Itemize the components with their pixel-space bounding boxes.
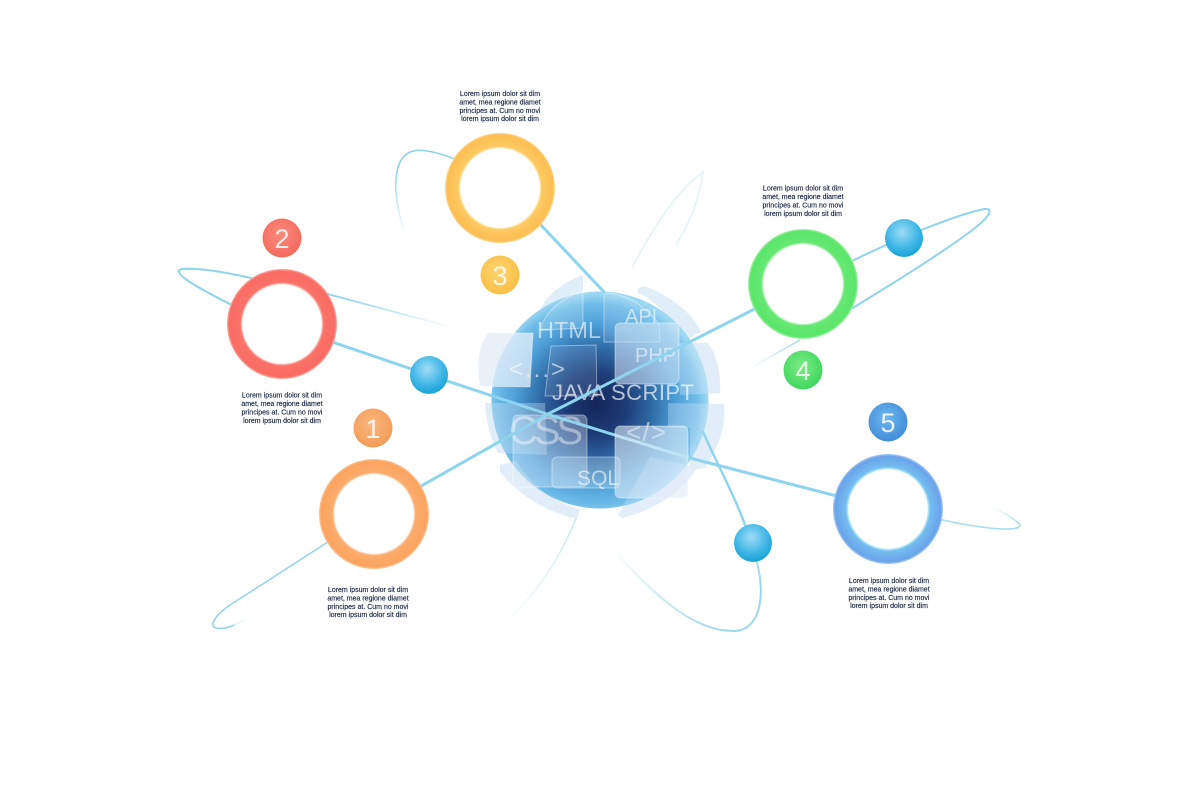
badge 4 <box>784 350 822 390</box>
label: SQL: SQL <box>577 467 619 490</box>
connector lines through globe <box>300 208 860 525</box>
tile: left angle bracket <box>478 333 533 387</box>
text block: item 1: amet, mea regione diamet <box>327 596 409 602</box>
label: CSS: CSS <box>509 409 583 453</box>
badge 2: 2 <box>274 224 290 254</box>
orbit: faint lower ellipse <box>498 518 576 628</box>
ring 5 <box>833 454 943 564</box>
text block: item 5: amet, mea regione diamet <box>848 586 930 594</box>
tile: SQL <box>552 457 620 488</box>
text block: item 5 <box>848 578 930 610</box>
text block: item 4: principes at. Cum no movi <box>763 202 844 210</box>
tile: API <box>604 293 660 342</box>
badge 5 <box>868 402 908 442</box>
orbit: lower left tip fade <box>234 618 250 625</box>
text block: item 4 <box>762 186 844 218</box>
text block: item 3: principes at. Cum no movi <box>460 108 541 115</box>
line: ring 3 to globe <box>525 208 604 292</box>
badge 3 <box>480 256 520 294</box>
text block: item 3: lorem ipsum dolor sit dim <box>461 116 539 123</box>
tile: CSS <box>513 415 587 487</box>
ring 3 <box>445 133 555 243</box>
badge 4: 4 <box>795 356 811 386</box>
text block: item 1: lorem ipsum dolor sit dim <box>329 612 407 619</box>
ring 1 <box>319 459 429 569</box>
tile: HTML <box>540 291 583 330</box>
ball: upper right <box>885 219 923 257</box>
shard: lower right, over the tile <box>618 457 697 518</box>
tile: closing tag, over the connector <box>615 426 688 498</box>
label: API: API <box>625 306 657 328</box>
line: globe to blue ball <box>703 432 745 525</box>
text block: item 4: lorem ipsum dolor sit dim <box>764 211 842 218</box>
orbit: lower left loop through ring 1 <box>213 531 345 628</box>
text block: item 1: principes at. Cum no movi <box>328 604 409 611</box>
badge 5: 5 <box>880 408 896 438</box>
text block: item 2: lorem ipsum dolor sit dim <box>243 418 321 425</box>
orbit: fading tail below ring 4 <box>754 340 800 366</box>
orbit: far right tail fade <box>990 506 1016 521</box>
text block: item 2: Lorem ipsum dolor sit dim <box>242 392 322 400</box>
text block: item 5: Lorem ipsum dolor sit dim <box>849 578 929 585</box>
ball: lower right <box>734 524 772 562</box>
badge 1: 1 <box>365 414 381 444</box>
orbit: fading tail right of ring 2 <box>320 292 455 328</box>
label: angle brackets: <...> <box>509 356 565 383</box>
text block: item 1 <box>327 587 409 619</box>
badge 3: 3 <box>492 261 508 291</box>
orbit: far right loop through ring 5 <box>930 517 1020 529</box>
badge 2 <box>262 218 302 258</box>
text block: item 2 <box>241 392 323 425</box>
line: ring 2 to ring 5 <box>300 331 860 502</box>
line: ring 1 to ring 4 <box>400 296 780 498</box>
text block: item 5: principes at. Cum no movi <box>849 595 930 602</box>
ball: left <box>410 356 448 394</box>
label: PHP: PHP <box>635 345 676 367</box>
text block: item 2: amet, mea regione diamet <box>241 401 323 408</box>
badge 1 <box>354 408 392 448</box>
text block: item 3: amet, mea regione diamet <box>459 100 541 106</box>
text block: item 2: principes at. Cum no movi <box>242 410 323 416</box>
text block: item 1: Lorem ipsum dolor sit dim <box>328 587 408 594</box>
orbit: right loop through ring 4 <box>830 209 990 322</box>
text block: item 3: Lorem ipsum dolor sit dim <box>460 91 540 98</box>
orbit: left loop through ring 2 <box>179 269 300 314</box>
label: HTML: HTML <box>537 317 601 343</box>
tile: PHP <box>615 323 679 384</box>
ring 2 <box>227 269 337 379</box>
text block: item 5: lorem ipsum dolor sit dim <box>850 603 928 610</box>
outer shards behind sphere <box>485 275 724 519</box>
translucent shards over sphere <box>485 343 724 519</box>
globe sphere <box>492 292 708 508</box>
orbit: lower right loop through ball <box>608 544 761 631</box>
text block: item 4: amet, mea regione diamet <box>762 194 844 201</box>
orbit: faint upper ellipse <box>632 172 703 268</box>
globe <box>478 275 724 519</box>
label: closing tag: </> <box>626 417 666 447</box>
tile: dark centre <box>545 345 597 396</box>
text block: item 4: Lorem ipsum dolor sit dim <box>763 186 843 192</box>
orbit: upper left loop through ring 3 <box>396 150 470 235</box>
text block: item 3 <box>459 91 541 123</box>
label: JAVA SCRIPT: JAVA SCRIPT <box>552 380 694 405</box>
ring 4 <box>748 229 858 339</box>
